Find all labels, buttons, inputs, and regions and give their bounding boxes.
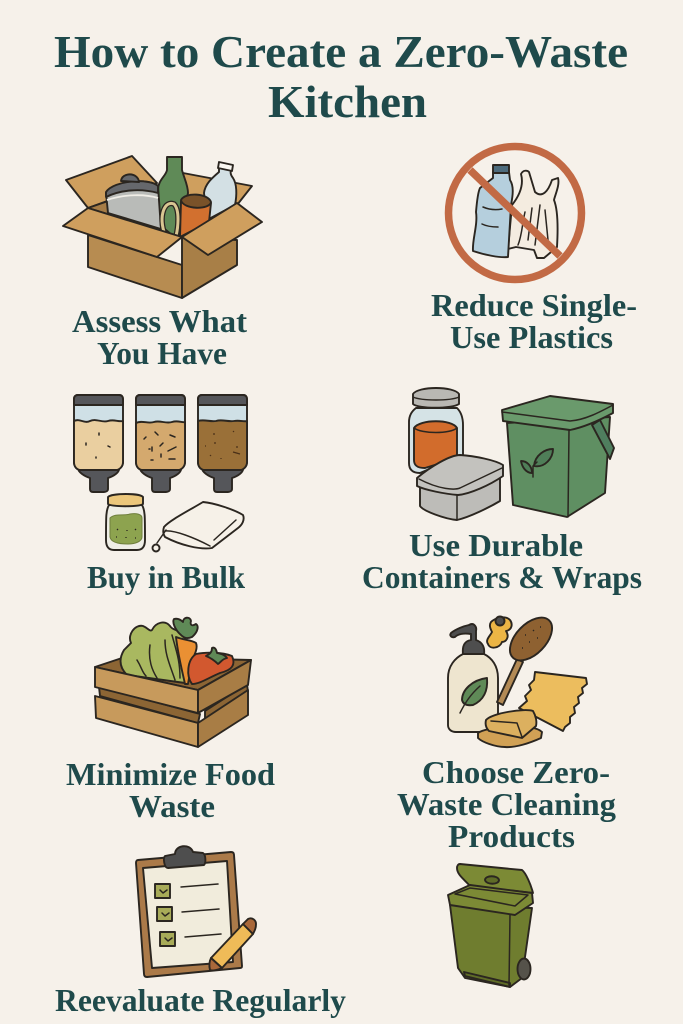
label: minimize food waste: Minimize Food: [66, 756, 275, 792]
icon: glass jar with orange liquid: [409, 388, 463, 473]
panel: choose zero-waste cleaning products: [397, 610, 616, 854]
icon: crate of vegetables: [95, 618, 251, 747]
icon: clipboard with pencil: [136, 846, 256, 977]
icon: jar of green powder: [106, 494, 145, 550]
label: choose zero-waste cleaning products: Choose Zero-: [422, 754, 610, 790]
panel: reduce single-use plastics: [431, 146, 637, 355]
label: choose zero-waste cleaning products: [397, 754, 616, 854]
icon: third checkbox: [160, 932, 175, 946]
icon: grey food tub: [417, 455, 503, 520]
icon: yellow sponge: [519, 672, 587, 731]
icon: yellow sponge flower: [487, 616, 512, 648]
panel: reevaluate regularly: [55, 846, 346, 1018]
label: reduce single-use plastics: Reduce Single-: [431, 287, 637, 323]
icon: first checkbox: [155, 884, 170, 898]
panel: buy in bulk: [74, 395, 247, 595]
label: assess what you have: Assess What: [72, 303, 247, 339]
label: reduce single-use plastics: Use Plastics: [450, 319, 613, 355]
label: reduce single-use plastics: [431, 287, 637, 355]
icon: no plastics sign: [448, 146, 582, 280]
title: [54, 26, 628, 127]
icon: cardboard box with containers: [63, 156, 262, 298]
label: use durable containers and wraps: Containers & Wraps: [362, 559, 642, 595]
icon: green compost bin: [502, 396, 614, 517]
label: minimize food waste: Waste: [129, 788, 215, 824]
icon: second checkbox: [157, 907, 172, 921]
panel: assess what you have: [63, 156, 262, 371]
icon: dispenser three: [198, 395, 247, 492]
label: buy in bulk: Buy in Bulk: [87, 559, 245, 595]
label: assess what you have: You Have: [97, 335, 227, 371]
icon: jar, tub and compost bin: [409, 388, 614, 520]
panel: use durable containers and wraps: [362, 388, 642, 595]
icon: green wheelie bin: [448, 864, 533, 987]
icon: soap bottle, brush, bar soap and sponge: [448, 610, 587, 747]
icon: wooden brush: [497, 610, 560, 705]
icon: soap bar on dish: [478, 710, 542, 747]
label: use durable containers and wraps: [362, 527, 642, 595]
label: choose zero-waste cleaning products: Products: [448, 818, 575, 854]
title: Kitchen: [268, 76, 427, 127]
label: choose zero-waste cleaning products: Waste Cleaning: [397, 786, 616, 822]
icon: dispenser two: [136, 395, 185, 492]
icon: bulk dispensers, jar and bag: [74, 395, 247, 552]
icon: pump bottle: [448, 624, 498, 732]
icon: cloth bag: [152, 502, 244, 552]
label: assess what you have: [72, 303, 247, 371]
label: reevaluate regularly: Reevaluate Regularly: [55, 982, 346, 1018]
title: How to Create a Zero-Waste: [54, 26, 628, 77]
icon: pencil: [209, 918, 256, 970]
label: minimize food waste: [66, 756, 275, 824]
icon: dispenser one: [74, 395, 123, 492]
label: use durable containers and wraps: Use Durable: [409, 527, 583, 563]
panel: minimize food waste: [66, 618, 275, 824]
